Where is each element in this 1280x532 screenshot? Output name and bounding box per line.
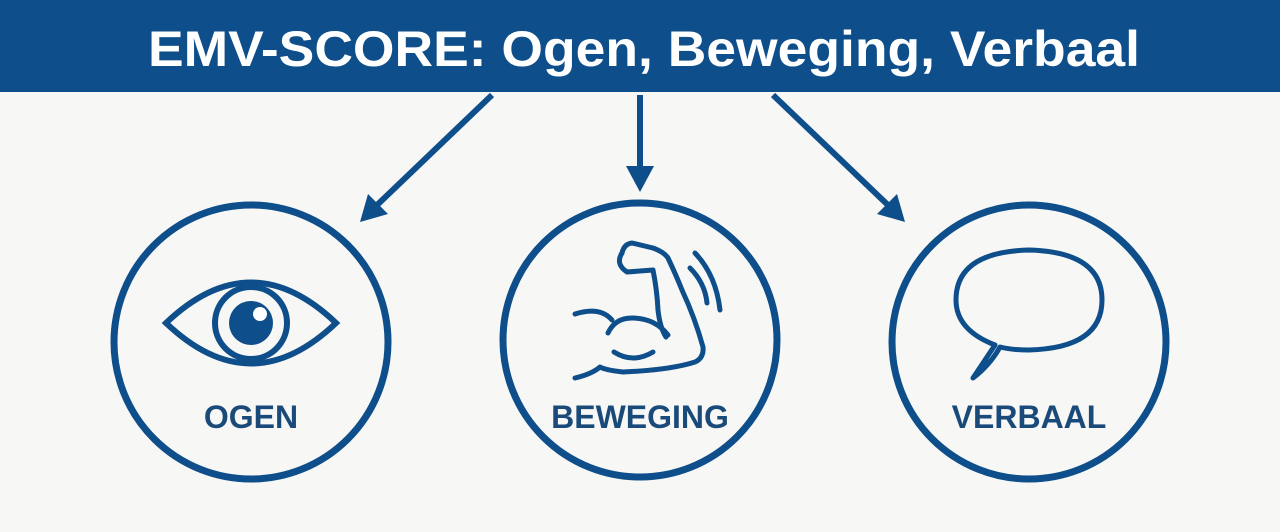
- icon: speech bubble: [956, 250, 1102, 378]
- arrow: right: [773, 95, 905, 222]
- label: verbaal: VERBAAL: [952, 399, 1106, 435]
- icon: muscle: [575, 243, 720, 378]
- icon: eye: [166, 282, 336, 364]
- label: beweging: BEWEGING: [551, 399, 729, 435]
- title banner: [0, 0, 1280, 92]
- panel: beweging: [503, 203, 777, 477]
- title banner: EMV-SCORE: Ogen, Beweging, Verbaal: [148, 21, 1140, 77]
- label: ogen: OGEN: [204, 399, 298, 435]
- panel: verbaal: [892, 205, 1166, 479]
- arrow: left: [360, 95, 492, 222]
- panel: ogen: [114, 205, 388, 479]
- arrow: middle: [626, 95, 654, 192]
